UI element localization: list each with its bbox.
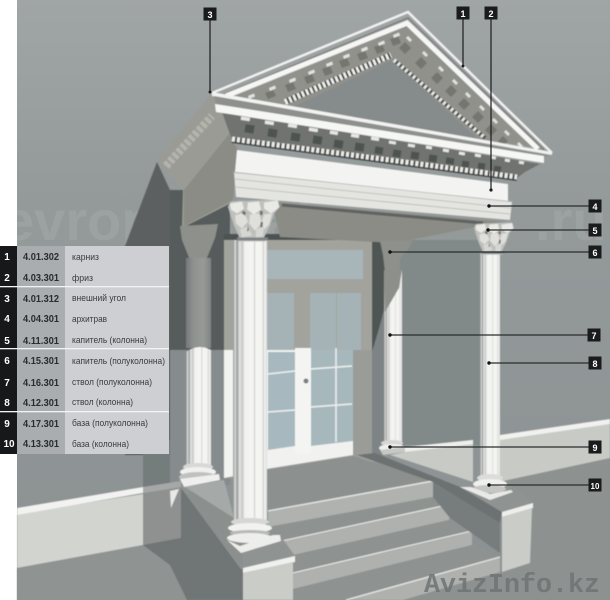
right plinth top: [460, 484, 533, 512]
right glass upper second: [337, 293, 361, 353]
floor shadow left: [143, 538, 243, 600]
row numbers: 9: [4, 419, 10, 430]
half column: [379, 240, 413, 455]
left side soffit: [157, 93, 238, 228]
half column capital: [380, 240, 413, 272]
door side dark shadow: [372, 238, 386, 352]
part codes: 4.03.301: [23, 273, 59, 284]
transom glass: [265, 250, 363, 279]
baseboard right: [390, 419, 610, 482]
left plinth wall top: [183, 480, 293, 568]
callout 7: [388, 328, 600, 342]
callout 9: [388, 440, 602, 454]
number column: [0, 246, 17, 454]
right rake modillions: [406, 36, 523, 148]
steps: [268, 481, 500, 600]
cornice modillion tips: [241, 116, 524, 164]
wall shaded between half column and right column: [372, 240, 482, 445]
row group dividers: [0, 286, 169, 412]
part codes: 4.12.301: [23, 398, 59, 409]
riser 1: [268, 481, 433, 527]
part names: внешний угол: [72, 293, 126, 304]
left lower glass: [268, 352, 295, 450]
right plinth lip: [502, 503, 533, 517]
shadow under architrave: [282, 205, 483, 223]
callout 1: [456, 6, 470, 68]
callout 4: 4: [592, 202, 598, 212]
floor right: [390, 458, 610, 600]
callout 2: [484, 6, 498, 192]
muntins: [268, 348, 352, 442]
right plinth face: [502, 508, 532, 572]
front column shaft: [233, 240, 267, 522]
part names: капитель (полуколонна): [72, 356, 165, 367]
door wall lower: [234, 350, 372, 478]
right plinth shadow strip: [357, 453, 502, 523]
callout 7: 7: [591, 331, 597, 341]
row numbers: 2: [4, 273, 10, 284]
step nosings: [268, 481, 500, 600]
door lower lit: [224, 350, 234, 478]
door top shadow: [224, 234, 382, 240]
plinth wall side: [181, 488, 243, 600]
part names: ствол (полуколонна): [72, 377, 152, 388]
part codes: 4.17.301: [23, 419, 59, 430]
callout 10: [487, 478, 602, 492]
callout 5: 5: [592, 226, 598, 236]
soffit modillion band: [166, 116, 212, 166]
row numbers: 8: [4, 398, 10, 409]
lower left wall shade: [143, 440, 184, 490]
raking cornice soffit: [232, 26, 532, 147]
riser 4: [346, 557, 500, 600]
callout 8: [487, 356, 602, 370]
right plinth dark side: [433, 481, 500, 553]
tread 4: [293, 545, 500, 600]
right column capital: [474, 222, 514, 255]
row numbers: 1: [4, 252, 10, 263]
horizontal cornice underside: [222, 112, 540, 178]
row numbers: [3, 252, 15, 450]
right rake blocks: [399, 42, 508, 146]
callout 5: [486, 224, 602, 236]
part codes: 4.16.301: [23, 378, 59, 389]
raking cornice mouldings: [212, 12, 552, 153]
front column: [227, 200, 281, 553]
riser 3: [293, 532, 472, 589]
lit recess wall: [170, 350, 230, 485]
left wall shadow: [125, 162, 184, 490]
part codes: [23, 252, 59, 450]
name column: [65, 246, 169, 454]
callout 6: [388, 246, 602, 258]
right glass upper: [310, 293, 336, 353]
right column: [460, 222, 514, 500]
front column base: [227, 518, 281, 553]
door surround: [224, 234, 386, 478]
left pedestal top: [242, 535, 295, 569]
row numbers: 10: [3, 439, 15, 450]
callout 1: 1: [460, 9, 466, 19]
wall strip by half column: [372, 312, 384, 456]
parts table: [0, 246, 169, 454]
left column: [179, 224, 220, 487]
tread 2: [268, 497, 452, 541]
part codes: 4.04.301: [23, 314, 59, 325]
page margin: [0, 0, 17, 600]
part codes: 4.11.301: [23, 336, 59, 347]
rake dentils: [285, 55, 485, 138]
code column: [17, 246, 65, 454]
right column base: [460, 474, 513, 500]
cornice dentils: [232, 139, 517, 178]
callout 8: 8: [592, 359, 598, 369]
watermark: site name: evropeiskaja: [3, 189, 342, 252]
frieze: [235, 150, 508, 201]
left pedestal lip: [243, 556, 295, 573]
part codes: 4.13.301: [23, 439, 59, 450]
callout 3: [204, 8, 216, 94]
callout 6: 6: [592, 248, 598, 258]
half column base: [379, 440, 405, 455]
callout 2: 2: [488, 9, 494, 19]
right lower glass: [311, 350, 353, 446]
left rake modillions: [248, 32, 400, 99]
watermark: site name: .ru: [535, 189, 607, 252]
ceiling under architrave: [272, 202, 505, 243]
part names: база (колонна): [72, 439, 129, 450]
cornice modillion blocks: [244, 124, 501, 173]
row numbers: 7: [4, 378, 10, 389]
horizontal cornice mouldings: [212, 92, 552, 163]
porch floor: [267, 456, 433, 510]
door frame upper: [224, 238, 374, 478]
row numbers: 3: [4, 294, 10, 305]
door knob: [304, 378, 308, 384]
floor left: [17, 545, 187, 600]
left column base: [179, 463, 220, 487]
lit patch on wall top: [185, 480, 234, 518]
right column shaft: [480, 252, 500, 480]
row numbers: 5: [4, 336, 10, 347]
left column upper shaft: [186, 258, 211, 348]
part names: [72, 252, 165, 450]
half column shaft shadow: [384, 270, 402, 312]
architrave: [233, 172, 513, 220]
row numbers: 4: [4, 314, 10, 325]
baseboard left: [17, 481, 182, 568]
part names: капитель (колонна): [72, 335, 147, 346]
left rake blocks: [265, 36, 401, 99]
white door: [266, 350, 353, 469]
recess wall behind columns: [170, 190, 230, 485]
callout 9: 9: [592, 443, 598, 453]
left pedestal face: [243, 562, 293, 600]
part codes: 4.15.301: [23, 356, 59, 367]
part codes: 4.01.302: [23, 252, 59, 263]
part names: база (полуколонна): [72, 418, 148, 429]
callouts: [204, 6, 602, 492]
callout 10: 10: [591, 482, 600, 491]
front column capital: [228, 200, 280, 242]
part names: фриз: [72, 273, 93, 284]
part names: ствол (колонна): [72, 397, 133, 408]
riser 2: [282, 505, 452, 555]
pediment tympanum: [293, 60, 478, 139]
part names: архитрав: [72, 314, 107, 325]
callout 4: [487, 200, 602, 212]
soffit shadow face: [184, 134, 238, 226]
left column lit shaft: [186, 347, 211, 470]
row numbers: 6: [4, 356, 10, 367]
part names: карниз: [72, 252, 99, 263]
left column capital: [180, 224, 218, 260]
part codes: 4.01.312: [23, 294, 59, 305]
left glass upper: [266, 293, 294, 353]
tread 3: [293, 520, 472, 573]
centre stile: [295, 348, 311, 453]
callout 3: 3: [207, 10, 213, 20]
half column shaft: [384, 270, 402, 445]
